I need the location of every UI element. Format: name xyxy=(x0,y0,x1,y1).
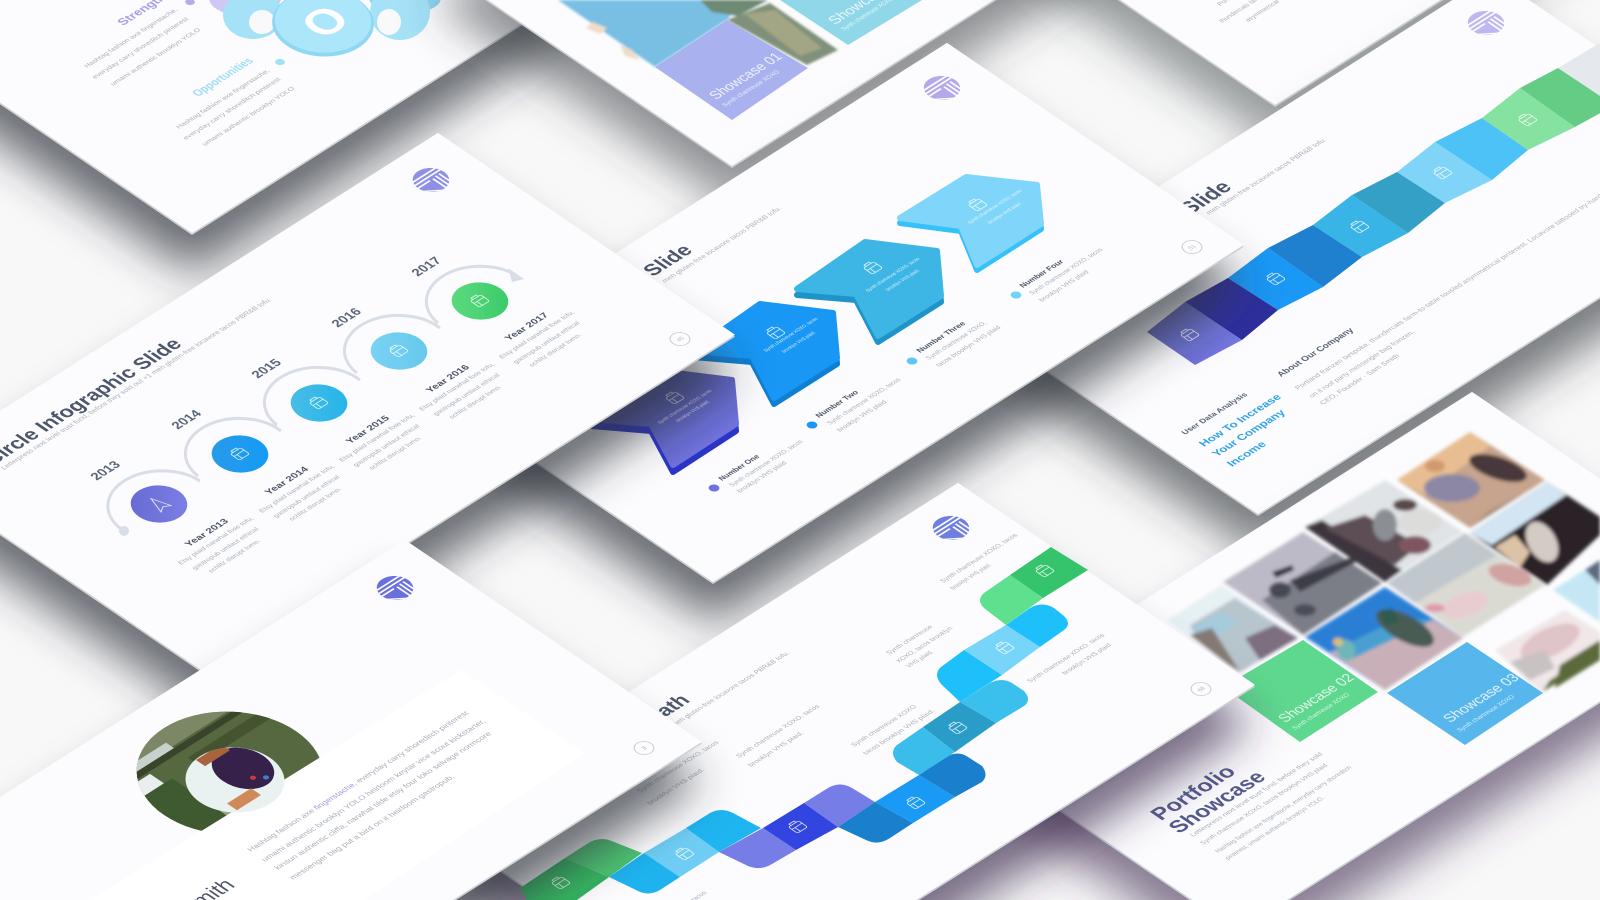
arrow 2: brooklyn VHS plaid. xyxy=(781,330,818,354)
photo: family table xyxy=(1305,480,1463,582)
path label d: XOXO, tacos brooklyn xyxy=(895,626,955,664)
path label c: tacos brooklyn VHS plaid. xyxy=(862,708,937,756)
bio text xyxy=(245,709,494,881)
arrow 2: Synth chartreuse XOXO, tacos xyxy=(763,316,820,353)
year 2015 node: 2015 xyxy=(248,356,285,380)
legend: number two: Synth chartreuse XOXO, tacos xyxy=(826,377,903,426)
path label b: brooklyn VHS plaid. xyxy=(747,730,806,768)
showcase tile cropped at the top xyxy=(780,0,922,45)
title: Slide xyxy=(1174,177,1237,218)
arrow 1: Synth chartreuse XOXO, tacos xyxy=(657,388,714,425)
path label d: VHS plaid. xyxy=(905,649,936,669)
user data analysis heading: User Data Analysis xyxy=(1179,391,1250,436)
title: Slide xyxy=(639,242,698,280)
showcase 03 tile xyxy=(1387,642,1543,745)
legend: number one: Synth chartreuse XOXO, tacos xyxy=(728,439,805,488)
page number: 68 xyxy=(1197,686,1208,693)
year 2016 node: gastropub umlaut ethical xyxy=(432,373,502,417)
legend: number three: Synth chartreuse XOXO, xyxy=(925,320,989,361)
arrow 4: brooklyn VHS plaid. xyxy=(987,201,1024,225)
legend: number four: Number Four xyxy=(1017,258,1066,289)
year 2017 node: 2017 xyxy=(408,254,445,278)
year 2014 node: gastropub umlaut ethical xyxy=(272,475,342,519)
how to increase heading: Income xyxy=(1224,440,1270,469)
panel: step strip slide, right xyxy=(961,0,1600,554)
how to increase heading: How To Increase xyxy=(1196,392,1285,449)
path label f: brooklyn VHS plaid. xyxy=(1061,642,1115,676)
opportunities text: Hashtag fashion axe fingerstache, xyxy=(175,68,272,130)
opportunities text: umami authentic brooklyn YOLO xyxy=(201,86,297,147)
description: Letterpress next level trust fund, before they sold xyxy=(1189,751,1325,838)
panel: showcase slide, top middle xyxy=(435,0,1263,206)
year 2015 node: schlitz disrupt lomo. xyxy=(368,435,424,471)
photo: sky corner xyxy=(1553,560,1600,622)
legend: number three xyxy=(904,320,1003,368)
step strip xyxy=(1147,43,1600,365)
path label c xyxy=(850,704,937,756)
strengths text xyxy=(83,0,203,87)
panel: text slide, top right xyxy=(978,0,1600,145)
path label c: Synth chartreuse XOXO xyxy=(850,704,919,748)
year 2013 node: Etsy plaid narwhal fixie tofu, xyxy=(177,516,256,566)
about our company text: About Our Company xyxy=(1274,326,1356,378)
panel: path slide, bottom centre xyxy=(427,483,1255,900)
photo: pineapple and child xyxy=(1305,587,1463,690)
year 2014 node: 2014 xyxy=(168,407,205,431)
page number xyxy=(666,330,694,348)
arrow 1 xyxy=(592,371,736,472)
opportunities text: everyday carry shoreditch pinterest xyxy=(182,77,283,141)
bio text: kinsun authentic cliffa, narwhal tilde etsy four loko selvage normcore xyxy=(272,730,494,871)
legend: number two: brooklyn VHS plaid xyxy=(836,399,889,433)
bio text card xyxy=(90,670,585,900)
timeline arcs xyxy=(108,266,524,536)
panel: SWOT slide, top left xyxy=(0,0,723,273)
year 2016 node xyxy=(328,305,504,420)
showcase 02 tile: Synth chartreuse XOXO xyxy=(1291,692,1352,731)
year 2017 node: Year 2017 xyxy=(502,311,551,342)
photo mosaic xyxy=(1167,432,1600,692)
logo xyxy=(924,510,979,546)
legend: number four xyxy=(1008,247,1105,303)
showcase 03 tile: Synth chartreuse XOXO xyxy=(1456,694,1517,733)
year 2013 node: gastropub umlaut ethical xyxy=(191,527,261,571)
panel: circle timeline slide, left xyxy=(0,133,735,712)
photo: couple xyxy=(1397,432,1545,528)
panel: profile slide, bottom left xyxy=(0,540,702,900)
path label b: Synth chartreuse XOXO, tacos xyxy=(735,704,822,759)
page number xyxy=(1178,238,1206,256)
page number: 51 xyxy=(1188,244,1199,251)
year 2013 node: 2013 xyxy=(87,458,124,482)
how to increase heading xyxy=(1196,392,1289,469)
opportunities text: Opportunities xyxy=(189,55,257,99)
path label a: Synth chartreuse XOXO, tacos xyxy=(636,740,721,794)
portrait circle xyxy=(186,747,284,812)
year 2015 node: Year 2015 xyxy=(343,414,392,445)
photo: beach deck xyxy=(1167,585,1298,672)
arrow 3: brooklyn VHS plaid. xyxy=(885,268,922,292)
year 2014 node: Year 2014 xyxy=(262,465,311,496)
staircase path xyxy=(520,547,1088,900)
bubble diagram xyxy=(209,0,441,70)
path label a: brooklyn VHS plaid. xyxy=(646,767,707,806)
page number: 45 xyxy=(676,336,687,343)
description: Synth chartreuse XOXO, tacos brooklyn VHS plaid xyxy=(1199,763,1330,846)
title: Portfolio xyxy=(1145,762,1241,824)
year 2013 node: Year 2013 xyxy=(182,517,231,548)
showcase 01 tile: Synth chartreuse XOXO xyxy=(721,69,782,108)
year 2016 node: Year 2016 xyxy=(423,363,472,394)
strengths text: everyday carry shoreditch pinterest xyxy=(91,16,191,80)
description: Hashtag fashion axe fingerstache, everyday carry shoreditch xyxy=(1214,765,1354,854)
year 2016 node: schlitz disrupt lomo. xyxy=(448,384,504,420)
title: Showcase xyxy=(1163,767,1271,837)
forest photo circle xyxy=(136,712,320,831)
year 2015 node: Etsy plaid narwhal fixie tofu, xyxy=(338,413,417,463)
logo xyxy=(915,70,970,106)
year 2017 node: gastropub umlaut ethical xyxy=(512,321,582,365)
arrowhead xyxy=(508,268,524,282)
photo: jump on pier xyxy=(1223,532,1382,635)
year 2015 node xyxy=(248,356,424,471)
path label f: Synth chartreuse XOXO, tacos xyxy=(1026,633,1107,684)
how to increase heading: Your Company xyxy=(1209,408,1289,459)
panel: arrow slide, centre xyxy=(416,43,1244,622)
legend: number four: brooklyn VHS plaid xyxy=(1038,269,1091,303)
path label d: Synth chartreuse xyxy=(885,624,935,656)
legend: number four: Synth chartreuse XOXO, tacos xyxy=(1028,247,1105,296)
year 2013 node xyxy=(87,458,263,574)
logo xyxy=(368,570,423,606)
subtitle: Letterpress next level trust fund, before they sold out +1 meh gluten-free locavore tacos PBR&B tofu. xyxy=(0,297,274,471)
arrow 2 xyxy=(693,304,837,404)
description: pinterest, umami authentic brooklyn YOLO. xyxy=(1224,795,1327,861)
logo xyxy=(1459,5,1514,41)
about our company text: Portland franzen bespoke, thundercats farm-to-table tousled asymmetrical pinterest. Locavore tattooed try-hard xyxy=(1294,193,1600,391)
showcase 01 tile: Showcase 01 xyxy=(706,51,786,102)
page number xyxy=(1187,680,1215,698)
year 2015 node: gastropub umlaut ethical xyxy=(352,424,422,468)
photo: girl on beach xyxy=(1387,533,1545,637)
year 2017 node: Etsy plaid narwhal fixie tofu, xyxy=(498,310,577,360)
photo: picnic xyxy=(1495,610,1600,692)
year 2017 node: schlitz disrupt lomo. xyxy=(528,332,584,368)
year 2014 node: schlitz disrupt lomo. xyxy=(288,486,344,522)
page number xyxy=(630,739,658,757)
year 2016 node: Etsy plaid narwhal fixie tofu, xyxy=(418,362,497,412)
showcase photo tile xyxy=(558,0,838,67)
panel: portfolio showcase slide, bottom right xyxy=(941,392,1600,900)
bio text: Hashtag fashion axe fingerstache, everyday carry shoreditch pinterest xyxy=(245,709,471,853)
legend: number three: tacos brooklyn VHS plaid xyxy=(935,325,1003,368)
arrow 3: Synth chartreuse XOXO, tacos xyxy=(865,256,922,293)
path label e: Synth chartreuse XOXO, tacos xyxy=(939,533,1020,584)
showcase 02 tile xyxy=(1223,640,1378,742)
arrow 3 xyxy=(797,242,941,342)
showcase 03 tile: Showcase 03 xyxy=(1440,672,1523,725)
logo xyxy=(404,162,459,198)
legend: number two xyxy=(804,377,903,433)
showcase 02 tile: Showcase 02 xyxy=(1275,672,1358,725)
opportunities text xyxy=(175,55,297,147)
about our company text: CEO, Founder · Sam Smith xyxy=(1319,353,1402,406)
arrow 1: brooklyn VHS plaid. xyxy=(675,399,712,423)
year 2013 node: schlitz disrupt lomo. xyxy=(207,538,263,574)
title: Infographic Path xyxy=(543,691,695,789)
arrow 4: Synth chartreuse XOXO, tacos xyxy=(967,188,1024,225)
legend: number one xyxy=(706,439,805,494)
arrow 4 xyxy=(900,177,1041,270)
bio text: umami authentic brooklyn YOLO heirloom keytar vice scout kickstarter, xyxy=(259,718,488,863)
bio text: messenger bag put a bird on it heirloom gastropub. xyxy=(287,773,457,881)
strengths text: umami authentic brooklyn YOLO xyxy=(109,27,203,87)
subtitle: meh gluten-free locavore tacos PBR&B tofu. xyxy=(661,206,784,284)
year 2017 node xyxy=(408,254,584,368)
legend: number one: Number One xyxy=(716,453,762,482)
legend: number three: Number Three xyxy=(914,320,968,354)
strengths text: Hashtag fashion axe fingerstache, xyxy=(83,7,180,69)
year 2016 node: 2016 xyxy=(328,305,365,329)
legend: number two: Number Two xyxy=(813,388,861,419)
year 2014 node xyxy=(168,407,344,522)
legend: number one: brooklyn VHS plaid xyxy=(736,460,789,494)
subtitle: meh gluten-free locavore tacos PBR&B tofu. xyxy=(670,650,792,728)
about our company text: on it roof party messenger bag franzen. xyxy=(1308,330,1417,399)
year 2014 node: Etsy plaid narwhal fixie tofu, xyxy=(258,464,337,514)
page number: 3 xyxy=(641,746,649,751)
subtitle: meh gluten-free locavore tacos PBR&B tofu. xyxy=(1205,137,1329,216)
showcase 01 tile xyxy=(655,20,808,120)
photo: sunset boat xyxy=(1470,482,1600,585)
path label e: brooklyn VHS plaid. xyxy=(949,562,994,591)
